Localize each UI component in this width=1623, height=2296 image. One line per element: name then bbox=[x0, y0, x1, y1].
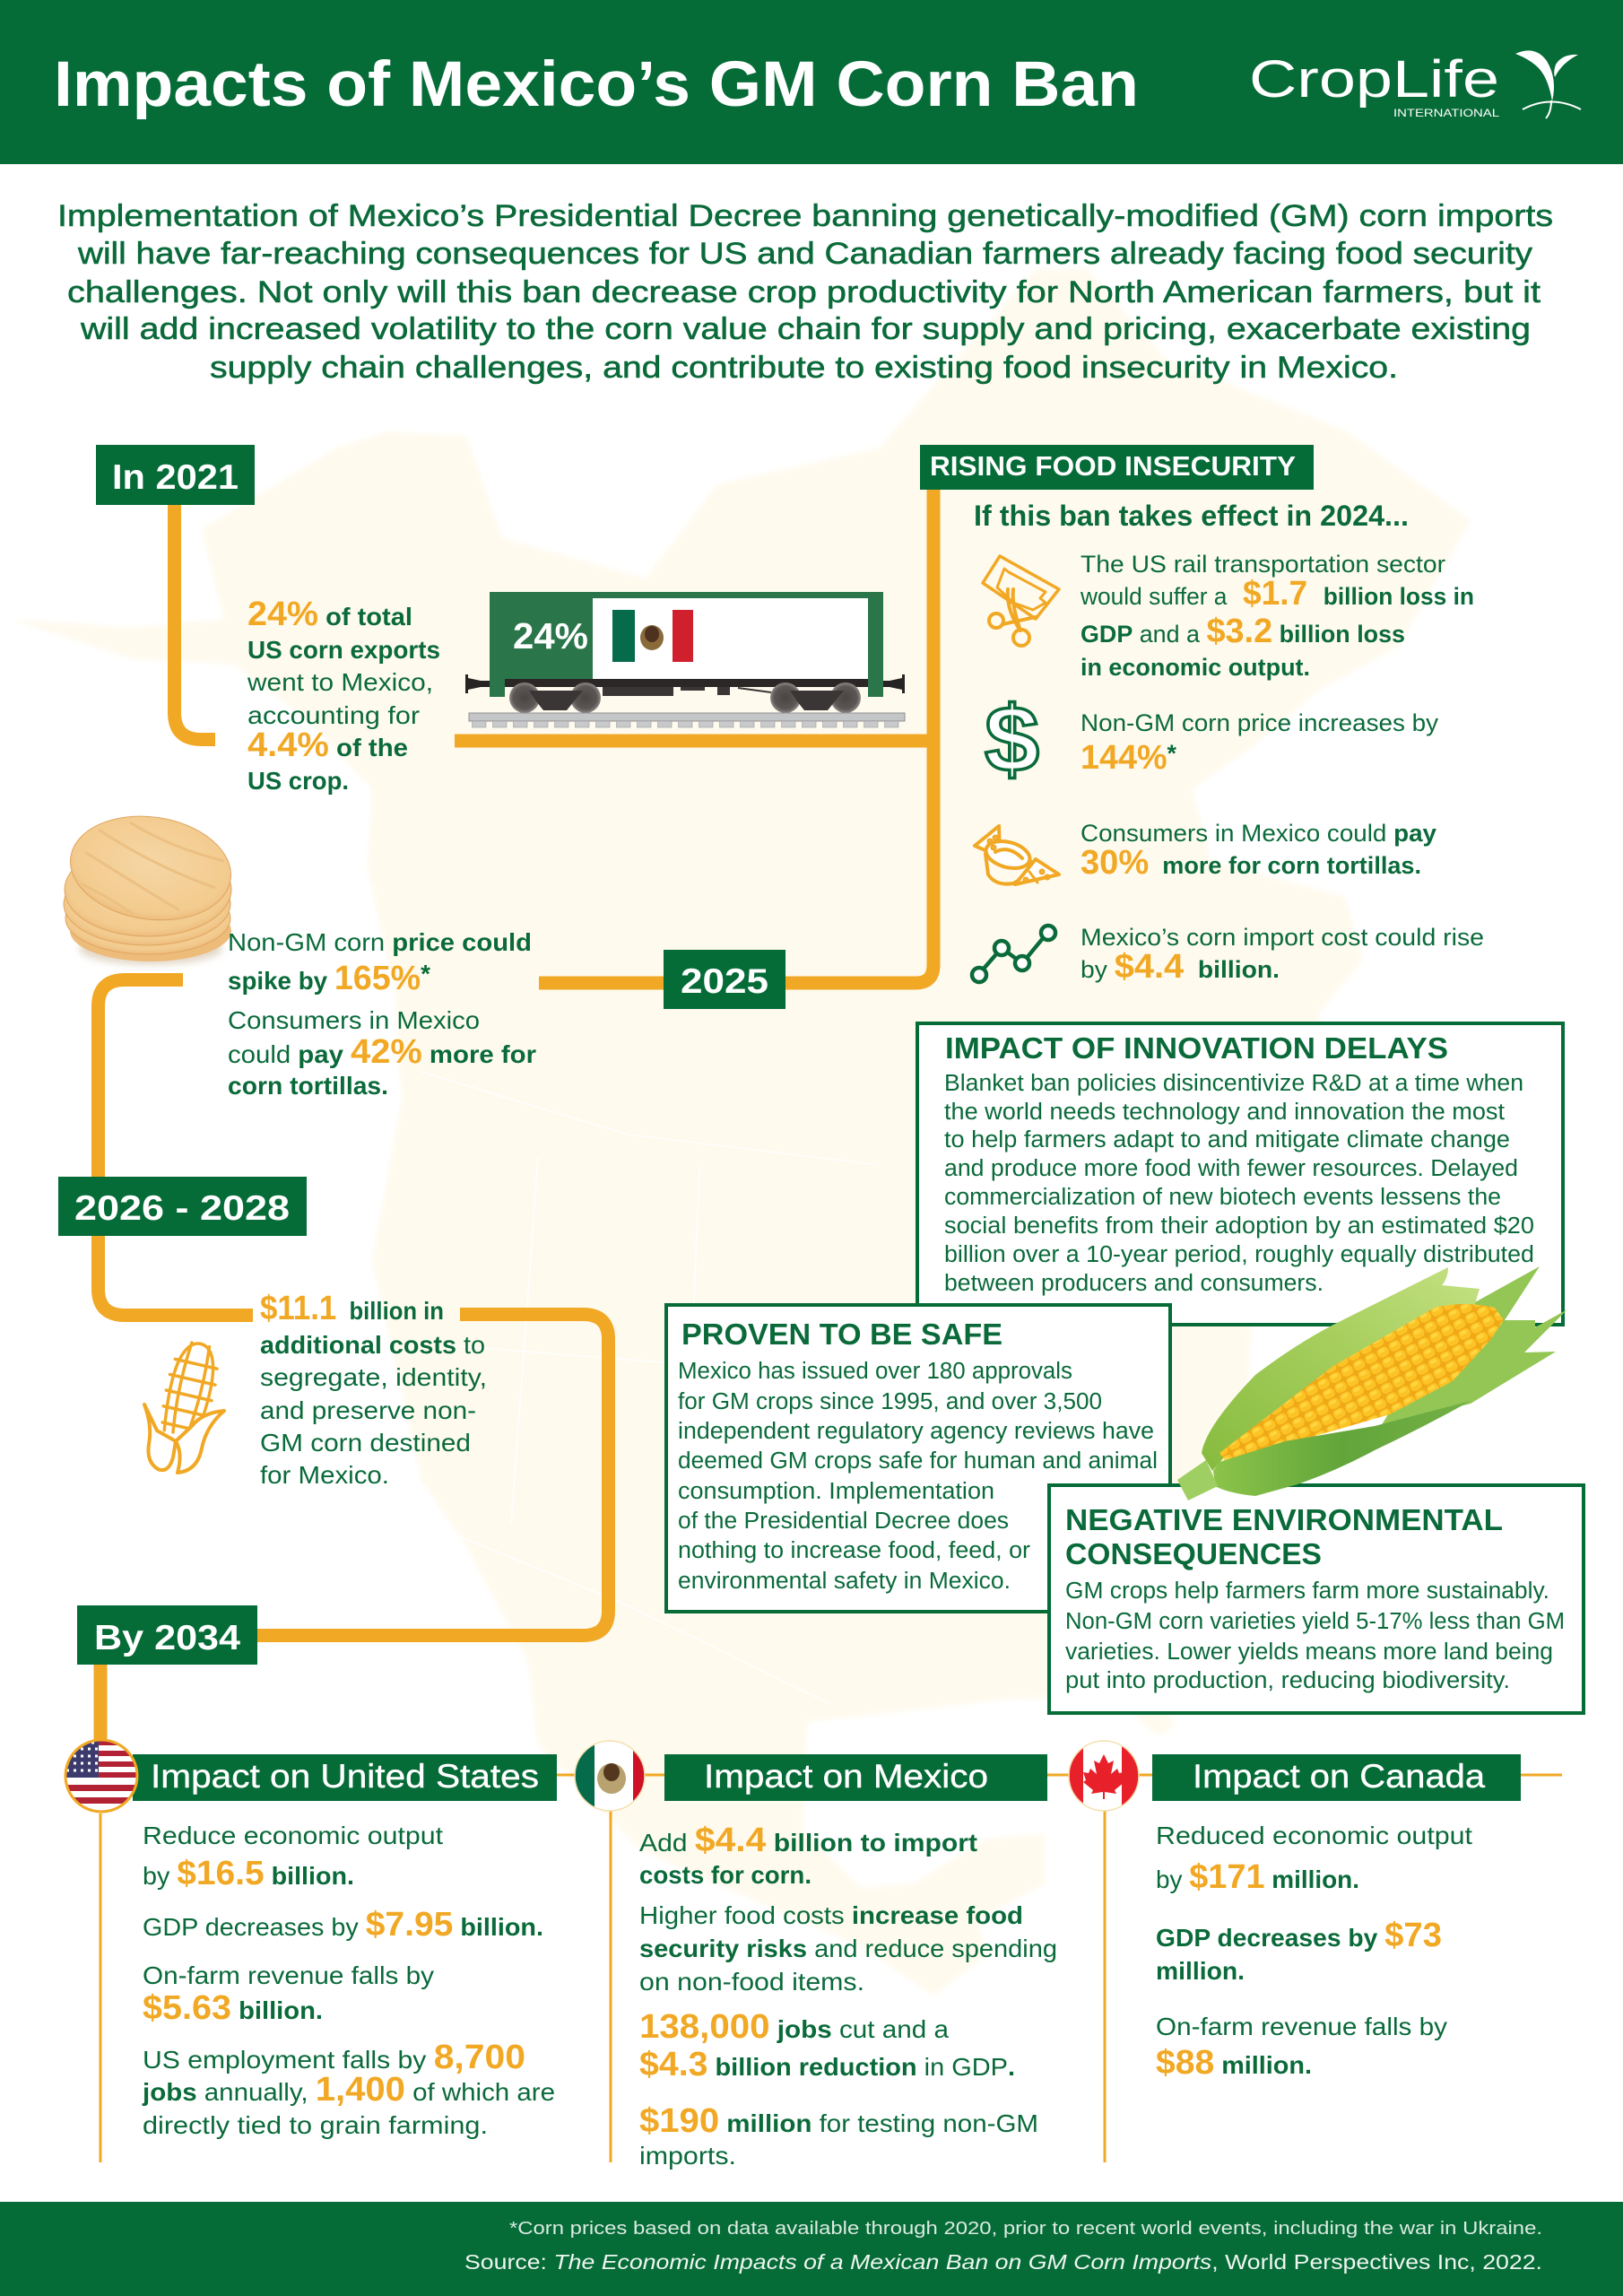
panel: proven to be safe: Mexico has issued over 180 approvals bbox=[678, 1359, 1072, 1384]
panel: impact of innovation delays bbox=[917, 1023, 1563, 1325]
column: Mexico impacts: imports. bbox=[639, 2142, 736, 2170]
label: 2025 bbox=[664, 950, 785, 1009]
panel: impact of innovation delays: the world needs technology and innovation the most bbox=[944, 1100, 1505, 1125]
text: $11.1 billion in additional costs bbox=[260, 1290, 487, 1489]
text: 24% of US corn exports: 4.4% of the bbox=[247, 726, 408, 764]
column: US impacts: On-farm revenue falls by bbox=[143, 1961, 434, 1989]
text: tortillas 30%: Consumers in Mexico could pay bbox=[1081, 820, 1436, 847]
text: import cost: by $4.4 billion. bbox=[1081, 948, 1280, 986]
text: 24% of US corn exports: 24% of total bbox=[247, 596, 412, 633]
panel: negative environmental consequences bbox=[1049, 1485, 1584, 1713]
text: $11.1 billion in additional costs: $11.1 billion in bbox=[260, 1290, 444, 1327]
column: Canada impacts: $88 million. bbox=[1156, 2044, 1312, 2082]
label: 2026 - 2028 bbox=[58, 1177, 307, 1236]
text: rail sector loss: would suffer a $1.7 billion loss in bbox=[1080, 575, 1474, 613]
text: 2025 non-GM price spike bbox=[228, 928, 536, 1100]
panel: negative environmental consequences: Non-GM corn varieties yield 5-17% less than GM bbox=[1065, 1609, 1565, 1634]
heading: Rising food insecurity: RISING FOOD INSECURITY bbox=[930, 450, 1296, 482]
column: US impacts: US employment falls by 8,700 bbox=[143, 2039, 525, 2076]
text: $11.1 billion in additional costs: for Mexico. bbox=[260, 1461, 389, 1489]
intro paragraph: Implementation of Mexico’s Presidential Decree banning genetically-modified (GM) corn imports bbox=[57, 199, 1553, 233]
icon: scissors cutting money bbox=[983, 556, 1059, 646]
column: US impacts: $5.63 billion. bbox=[143, 1989, 323, 2027]
panel: impact of innovation delays: commercialization of new biotech events lessens the bbox=[944, 1185, 1501, 1210]
label: 2025: 2025 bbox=[681, 962, 768, 1001]
intro paragraph: will add increased volatility to the corn value chain for supply and pricing, exacerbate existing bbox=[80, 312, 1531, 346]
text: rail sector loss: in economic output. bbox=[1081, 654, 1310, 681]
logo: CropLife International: INTERNATIONAL bbox=[1393, 109, 1500, 119]
label: In 2021 bbox=[96, 445, 255, 505]
column: Canada impacts: On-farm revenue falls by bbox=[1156, 2013, 1447, 2040]
text: tortillas 30%: 30% more for corn tortillas. bbox=[1081, 844, 1421, 882]
icon: tortilla chips and dip bbox=[975, 826, 1059, 884]
panel: impact of innovation delays: IMPACT OF INNOVATION DELAYS bbox=[945, 1031, 1448, 1065]
column: Mexico impacts: Add $4.4 billion to import bbox=[639, 1822, 977, 1859]
panel: negative environmental consequences: put into production, reducing biodiversity. bbox=[1065, 1668, 1510, 1693]
panel: negative environmental consequences: GM crops help farmers farm more sustainably. bbox=[1065, 1578, 1549, 1604]
column: US impacts: GDP decreases by $7.95 billion. bbox=[143, 1906, 543, 1944]
column: Mexico impacts: on non-food items. bbox=[639, 1968, 864, 1996]
text: 24% of US corn exports bbox=[247, 596, 440, 795]
column: Mexico impacts: security risks and reduce spending bbox=[639, 1935, 1057, 1962]
panel: negative environmental consequences: varieties. Lower yields means more land being bbox=[1065, 1639, 1553, 1665]
text: $11.1 billion in additional costs: GM corn destined bbox=[260, 1429, 471, 1457]
panel: impact of innovation delays: billion over a 10-year period, roughly equally distributed bbox=[944, 1242, 1534, 1267]
timeline connector bbox=[99, 490, 933, 1744]
column: Mexico impacts: $4.3 billion reduction in GDP. bbox=[639, 2046, 1015, 2083]
panel: impact of innovation delays: to help farmers adapt to and mitigate climate change bbox=[944, 1127, 1510, 1152]
section header: impact on Mexico bbox=[664, 1754, 1047, 1801]
text: import cost bbox=[1081, 924, 1484, 986]
label: By 2034 bbox=[77, 1605, 257, 1665]
footnote and source: *Corn prices based on data available through 2020, prior to recent world events, including the war in Ukraine. bbox=[509, 2219, 1542, 2239]
panel: negative environmental consequences: CONSEQUENCES bbox=[1065, 1537, 1322, 1570]
logo: CropLife International: CropLife bbox=[1249, 50, 1499, 109]
footnote and source: Source: The Economic Impacts of a Mexican Ban on GM Corn Imports , World Perspectives Inc, 2022. bbox=[464, 2250, 1542, 2274]
column: Mexico impacts: costs for corn. bbox=[639, 1861, 812, 1889]
intro paragraph: will have far-reaching consequences for US and Canadian farmers already facing food security bbox=[77, 237, 1532, 271]
icon: stack of tortillas bbox=[64, 806, 238, 965]
text: 2025 non-GM price spike: could pay 42% more for bbox=[228, 1033, 536, 1071]
text: rail sector loss: The US rail transportation sector bbox=[1081, 551, 1445, 578]
panel: impact of innovation delays: between producers and consumers. bbox=[944, 1271, 1324, 1296]
header band bbox=[0, 0, 1623, 164]
column: US impacts: Reduce economic output bbox=[143, 1822, 443, 1849]
title: Impacts of Mexico’s GM Corn Ban bbox=[54, 49, 1139, 120]
intro paragraph: challenges. Not only will this ban decrease crop productivity for North American farmers, but it bbox=[67, 275, 1541, 309]
panel: proven to be safe: environmental safety in Mexico. bbox=[678, 1569, 1011, 1594]
panel: proven to be safe bbox=[666, 1305, 1170, 1612]
column: US impacts: by $16.5 billion. bbox=[143, 1855, 354, 1892]
column: Mexico impacts: Higher food costs increase food bbox=[639, 1901, 1023, 1929]
icon: Canadian flag bbox=[1067, 1740, 1140, 1812]
text: 24% of US corn exports: US crop. bbox=[247, 767, 349, 795]
text: 24% of US corn exports: accounting for bbox=[247, 701, 420, 729]
panel: proven to be safe: PROVEN TO BE SAFE bbox=[681, 1318, 1002, 1351]
label: By 2034: By 2034 bbox=[94, 1619, 240, 1657]
column: Mexico impacts: $190 million for testing non-GM bbox=[639, 2102, 1038, 2140]
section header: impact on United States: Impact on United States bbox=[151, 1758, 539, 1795]
heading: Rising food insecurity bbox=[920, 445, 1314, 490]
text: $11.1 billion in additional costs: and preserve non- bbox=[260, 1396, 476, 1424]
text: non-GM price 144% bbox=[1081, 709, 1439, 777]
text: rail sector loss: GDP and a $3.2 billion loss bbox=[1081, 613, 1405, 650]
panel: proven to be safe: consumption. Implementation bbox=[678, 1479, 994, 1504]
text: non-GM price 144%: * bbox=[1167, 740, 1176, 767]
image: ear of corn in husk bbox=[1177, 1266, 1567, 1500]
text: 2025 non-GM price spike: corn tortillas. bbox=[228, 1072, 388, 1100]
panel: proven to be safe: independent regulatory agency reviews have bbox=[678, 1419, 1154, 1444]
footnote and source bbox=[464, 2219, 1542, 2274]
panel: negative environmental consequences: NEGATIVE ENVIRONMENTAL bbox=[1065, 1503, 1503, 1536]
column: US impacts bbox=[142, 1822, 555, 2139]
panel: impact of innovation delays: Blanket ban policies disincentivize R&D at a time when bbox=[944, 1071, 1523, 1096]
column: Canada impacts: Reduced economic output bbox=[1156, 1822, 1472, 1849]
text: rail sector loss bbox=[1080, 551, 1474, 681]
panel: impact of innovation delays: social benefits from their adoption by an estimated $20 bbox=[944, 1213, 1534, 1239]
logo: CropLife International bbox=[1249, 50, 1581, 119]
text: 24% of US corn exports: went to Mexico, bbox=[247, 668, 433, 696]
footer band bbox=[0, 2202, 1623, 2296]
column: Mexico impacts: 138,000 jobs cut and a bbox=[639, 2008, 949, 2046]
text: $11.1 billion in additional costs: segregate, identity, bbox=[260, 1363, 487, 1391]
column: Canada impacts: GDP decreases by $73 bbox=[1156, 1917, 1442, 1954]
label: 2026 - 2028: 2026 - 2028 bbox=[74, 1189, 290, 1228]
section header: impact on United States bbox=[133, 1754, 557, 1801]
column: Canada impacts: million. bbox=[1156, 1957, 1245, 1985]
intro paragraph bbox=[57, 199, 1553, 385]
panel: proven to be safe: deemed GM crops safe for human and animal bbox=[678, 1448, 1158, 1474]
section header: impact on Mexico: Impact on Mexico bbox=[704, 1758, 988, 1795]
icon: rail car with Mexican flag: 24% bbox=[513, 615, 588, 657]
column: Canada impacts bbox=[1156, 1822, 1472, 2082]
panel: proven to be safe: nothing to increase food, feed, or bbox=[678, 1538, 1031, 1563]
label: In 2021: In 2021 bbox=[112, 458, 239, 497]
section header: impact on Canada: Impact on Canada bbox=[1193, 1758, 1485, 1795]
column: US impacts: directly tied to grain farming. bbox=[143, 2111, 488, 2139]
text: 2025 non-GM price spike: spike by 165% bbox=[228, 960, 421, 997]
text: tortillas 30% bbox=[1081, 820, 1436, 882]
icon: Mexican flag bbox=[574, 1740, 646, 1812]
icon: US flag bbox=[63, 1738, 143, 1813]
icon: corn cob outline bbox=[144, 1339, 224, 1473]
text: non-GM price 144%: Non-GM corn price increases by bbox=[1081, 709, 1439, 736]
icon: rail car with Mexican flag bbox=[465, 592, 905, 728]
text: $11.1 billion in additional costs: additional costs to bbox=[260, 1331, 485, 1359]
icon: dollar sign: $ bbox=[985, 688, 1039, 792]
panel: proven to be safe: of the Presidential Decree does bbox=[678, 1509, 1009, 1534]
text: 24% of US corn exports: US corn exports bbox=[247, 636, 440, 664]
column: Mexico impacts bbox=[639, 1822, 1057, 2170]
background map of North America bbox=[9, 269, 1471, 1996]
section header: impact on Canada bbox=[1152, 1754, 1521, 1801]
text: import cost: Mexico’s corn import cost could rise bbox=[1081, 924, 1484, 951]
subheading: if ban takes effect: If this ban takes effect in 2024... bbox=[974, 500, 1409, 532]
text: non-GM price 144%: 144% bbox=[1081, 739, 1167, 777]
icon: rising line chart bbox=[972, 926, 1055, 982]
intro paragraph: supply chain challenges, and contribute to existing food insecurity in Mexico. bbox=[210, 351, 1398, 385]
column dividers bbox=[99, 1774, 1562, 2162]
column: Canada impacts: by $171 million. bbox=[1156, 1858, 1359, 1896]
text: 2025 non-GM price spike: * bbox=[421, 960, 430, 987]
column: US impacts: jobs annually, 1,400 of which are bbox=[142, 2071, 555, 2109]
text: 2025 non-GM price spike: Consumers in Mexico bbox=[228, 1006, 480, 1034]
text: 2025 non-GM price spike: Non-GM corn price could bbox=[228, 928, 532, 956]
panel: proven to be safe: for GM crops since 1995, and over 3,500 bbox=[678, 1389, 1102, 1414]
panel: impact of innovation delays: and produce more food with fewer resources. Delayed bbox=[944, 1156, 1518, 1181]
